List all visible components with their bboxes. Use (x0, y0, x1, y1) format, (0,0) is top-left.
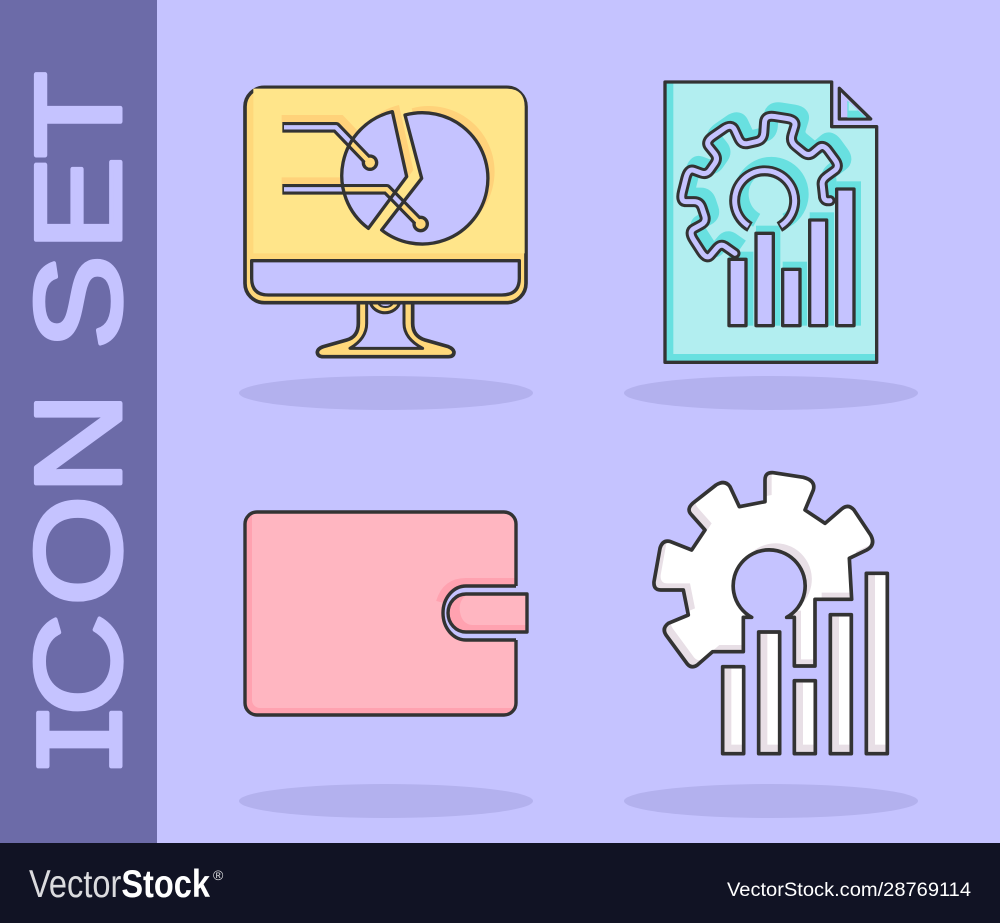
screen shadow of pie and circuit (282, 105, 494, 212)
heading: ICON SET: E (10, 156, 147, 251)
bars (723, 573, 887, 754)
monitor stand (317, 300, 454, 357)
monitor body (245, 87, 526, 303)
icon: monitor with pie chart (245, 87, 526, 357)
wallet body (245, 512, 516, 715)
document sheet (665, 82, 877, 362)
wallet clasp (443, 586, 518, 640)
icon: wallet (245, 505, 527, 715)
footer bar (0, 843, 1000, 923)
heading: ICON SET: T (10, 71, 147, 158)
image id: VectorStock.com/28769114 (727, 880, 971, 901)
shadow: gear chart (624, 784, 918, 818)
panel: sidebar (0, 0, 157, 843)
heading: ICON SET: I (15, 700, 147, 779)
gear (654, 473, 873, 667)
heading: ICON SET: N (10, 392, 147, 495)
icon: gear with bar chart (654, 466, 887, 754)
heading: ICON SET: S (10, 255, 147, 350)
pie chart fill (382, 113, 488, 244)
gear (682, 116, 837, 257)
lower monitor strip (252, 261, 519, 295)
heading: ICON SET: C (10, 613, 147, 716)
document outline (665, 82, 877, 362)
shadow: wallet (239, 784, 533, 818)
shadow: monitor (239, 376, 533, 410)
icon: document with gear and bars (665, 82, 877, 362)
heading: ICON SET: O (10, 495, 147, 606)
pie chart outline (382, 113, 488, 244)
logo: VectorStock: VectorStock (29, 863, 210, 906)
registered mark: ® (213, 867, 224, 883)
shadow: document (624, 376, 918, 410)
circuit lines (282, 127, 429, 232)
gear and bar shadows (688, 110, 844, 250)
folded corner (839, 88, 871, 119)
bars (729, 189, 854, 326)
